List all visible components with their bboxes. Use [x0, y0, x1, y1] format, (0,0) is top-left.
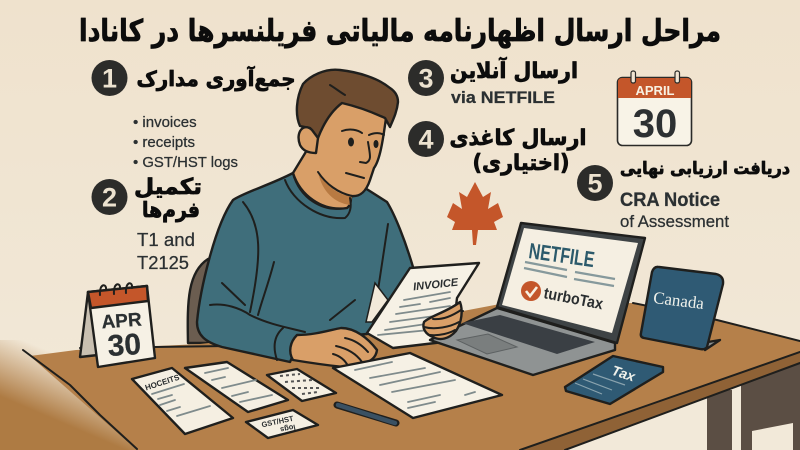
- step 3: [408, 56, 578, 107]
- step 5: CRA Notice: [620, 190, 720, 211]
- step 2: 2: [102, 182, 117, 212]
- step 5: [577, 159, 790, 231]
- check icon: [521, 281, 541, 301]
- step 5: دریافت ارزیابی نهایی: [620, 159, 790, 179]
- April 30 calendar: [618, 71, 692, 146]
- step 4: 4: [418, 124, 434, 154]
- calendar: Apr 30 desk stand: 30: [107, 328, 142, 363]
- GST/HST logs note: GST/HST: [261, 414, 295, 429]
- step 3: 3: [418, 64, 434, 94]
- small note paper: [267, 369, 336, 401]
- document on desk: [333, 353, 502, 418]
- step 1 list: • GST/HST logs: [133, 154, 238, 171]
- invoice sheet in hand: INVOICE: [413, 277, 459, 293]
- Canada tablet: [641, 267, 723, 350]
- April 30 calendar: APRIL: [636, 83, 675, 98]
- step 4: [408, 121, 586, 176]
- pen: [337, 405, 396, 423]
- NETFILE label: NETFILE: [527, 238, 596, 272]
- neck and face: [293, 100, 386, 209]
- step 2: تکمیل: [134, 175, 202, 200]
- step 4: (اختیاری): [472, 151, 570, 176]
- ear: [299, 127, 318, 153]
- turboTax label: turboTax: [542, 285, 604, 313]
- face details: [330, 85, 384, 178]
- GST/HST logs note: logs: [279, 423, 296, 435]
- table legs and floor: [520, 355, 800, 450]
- maple leaf icon: [447, 182, 503, 245]
- receipt paper: HOCEITS: [144, 373, 181, 392]
- calendar: Apr 30 desk stand: APR: [101, 310, 143, 333]
- right hand: [423, 302, 462, 339]
- step 2: T1 and: [137, 230, 195, 250]
- step 1 list: • invoices: [133, 114, 197, 131]
- step 4: ارسال کاغذی: [450, 126, 586, 151]
- step 3: via NETFILE: [451, 88, 555, 107]
- step 1: 1: [102, 64, 117, 94]
- phone: [565, 356, 663, 404]
- step 3: ارسال آنلاین: [450, 56, 578, 84]
- April 30 calendar: 30: [633, 102, 677, 146]
- step 1 list: • receipts: [133, 134, 195, 151]
- GST/HST logs note: [246, 410, 318, 438]
- check mark: [526, 287, 537, 296]
- sleeve lines: [210, 202, 388, 360]
- Canada tablet: Canada: [652, 288, 706, 313]
- step 1: [92, 60, 296, 171]
- step 2: [92, 175, 202, 273]
- sweater: [197, 173, 413, 362]
- hair: [297, 70, 398, 138]
- phone: Tax: [610, 362, 638, 385]
- chair: [188, 259, 215, 343]
- step 5: of Assessment: [620, 212, 729, 231]
- collar: [285, 180, 351, 218]
- step 2: T2125: [137, 253, 189, 273]
- calendar: Apr 30 desk stand: [80, 283, 155, 367]
- white gap behind arm: [366, 283, 388, 322]
- laptop: [430, 223, 645, 375]
- desk: [0, 303, 800, 450]
- person: [197, 70, 413, 369]
- step 1: جمع‌آوری مدارک: [136, 66, 296, 91]
- step 2: فرم‌ها: [142, 198, 200, 222]
- document paper: [185, 362, 288, 412]
- step 5: 5: [587, 168, 603, 198]
- left hand: [290, 328, 377, 369]
- invoice sheet in hand: [367, 263, 479, 348]
- step 1 list: [133, 114, 238, 171]
- receipt paper: [132, 368, 233, 434]
